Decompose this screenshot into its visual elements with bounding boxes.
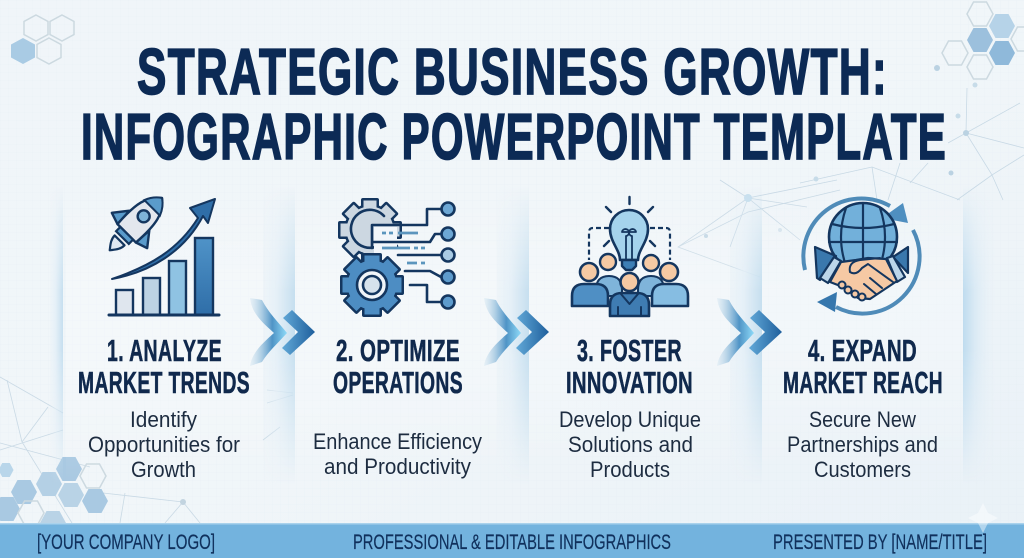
rocket [92, 180, 180, 268]
team right person [652, 263, 688, 306]
footer center: PROFESSIONAL & EDITABLE INFOGRAPHICS [353, 531, 671, 554]
step 4 text [787, 407, 938, 482]
arrow 2 [484, 298, 549, 366]
globe [829, 203, 897, 271]
left sleeve [815, 247, 841, 283]
step 3 text: Products [590, 457, 670, 482]
step 4 text: Customers [814, 457, 911, 482]
hexagons top left [11, 15, 74, 64]
sparkle [968, 503, 998, 533]
gear dark [340, 253, 404, 317]
team front person [610, 273, 649, 316]
step 4 [783, 333, 943, 482]
step 4 text: Partnerships and [787, 432, 938, 457]
right sleeve [887, 247, 908, 282]
step 1 heading: MARKET TRENDS [78, 365, 250, 400]
step 1 text [88, 407, 240, 482]
panel glow bands [52, 202, 984, 462]
team back row [596, 254, 664, 296]
network pattern bottom left [0, 377, 293, 523]
step 3 [559, 333, 701, 482]
step 3 heading: 3. FOSTER [577, 333, 682, 368]
step 2 heading: 2. OPTIMIZE [336, 333, 460, 368]
gear light [338, 198, 402, 262]
circular arrows [803, 198, 920, 314]
icon: gears and circuits [338, 198, 454, 317]
step 2 text: Enhance Efficiency [313, 429, 482, 454]
footer bar [0, 503, 1024, 558]
hexagons bottom left [0, 457, 108, 535]
step 2 text [313, 429, 482, 479]
team left person [572, 263, 608, 306]
step 1 heading [78, 333, 250, 400]
footer left: [YOUR COMPANY LOGO] [37, 531, 215, 554]
step 3 text: Solutions and [568, 432, 693, 457]
step 1 text: Identify [130, 407, 197, 432]
step 4 heading [783, 333, 943, 400]
hexagons top right [942, 2, 1024, 79]
step 3 heading [566, 333, 693, 400]
step 4 text: Secure New [809, 407, 916, 432]
step 1 text: Opportunities for [88, 432, 240, 457]
icon: idea and team [572, 197, 688, 316]
arrow 1 [250, 298, 315, 366]
arrow 3 [717, 298, 782, 366]
step 1 heading: 1. ANALYZE [107, 333, 222, 368]
network pattern top right [678, 65, 1024, 277]
icon: rocket and growth chart [92, 180, 219, 315]
step 2 heading [333, 333, 463, 400]
circuit panel mask [374, 227, 397, 262]
step 1 text: Growth [131, 457, 196, 482]
step 2 text: and Productivity [324, 454, 471, 479]
step 3 heading: INNOVATION [566, 365, 693, 400]
dashed connectors [589, 228, 670, 260]
step 3 text [559, 407, 701, 482]
growth arrow [112, 199, 215, 279]
step 2 heading: OPERATIONS [333, 365, 463, 400]
icon: globe and handshake [803, 198, 920, 314]
circuit lines [372, 202, 454, 308]
light bulb [604, 197, 655, 270]
step 3 text: Develop Unique [559, 407, 701, 432]
step 1 [78, 333, 250, 482]
step 4 heading: 4. EXPAND [808, 333, 917, 368]
step 2 [313, 333, 482, 479]
handshake [830, 258, 897, 300]
title [81, 35, 947, 173]
bar chart [109, 238, 219, 315]
